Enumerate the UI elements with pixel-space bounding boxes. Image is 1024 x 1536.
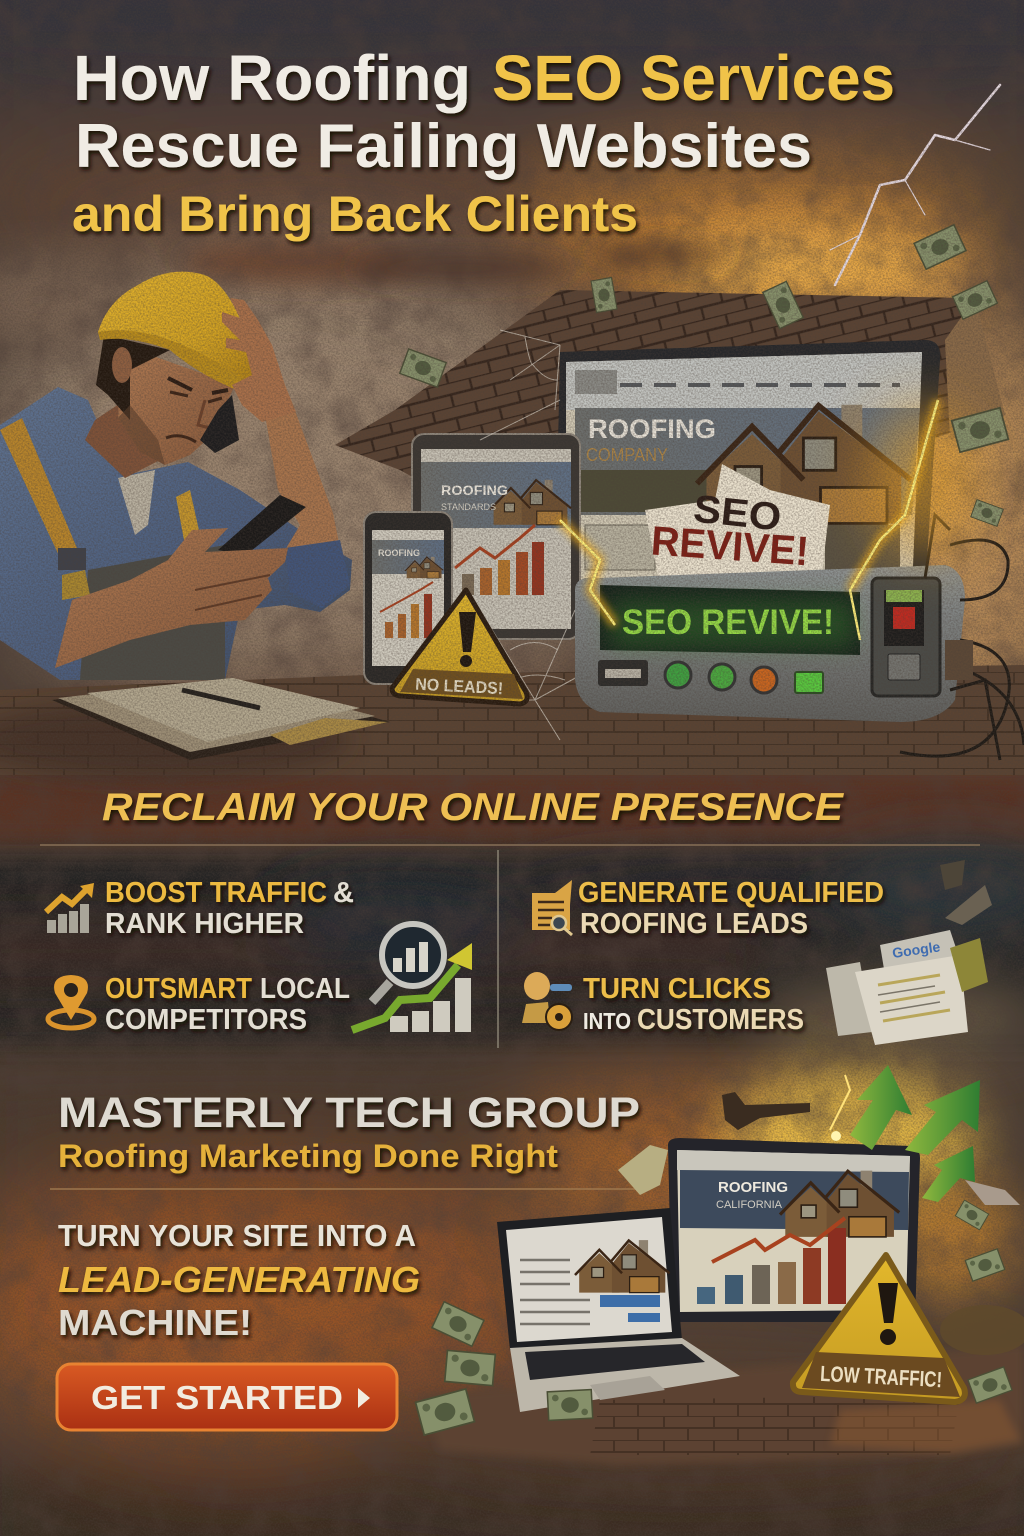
phone device: ROOFING <box>378 548 420 558</box>
google search papers <box>826 860 992 1045</box>
headline: lead generating machine: LEAD-GENERATING <box>58 1259 420 1300</box>
warning sign: no leads: NO LEADS! <box>415 675 504 698</box>
icon: person with coin <box>522 972 572 1030</box>
small tablet: STANDARDS <box>441 502 496 512</box>
screen heading: ROOFING <box>588 414 716 444</box>
warning sign: low traffic <box>793 1255 965 1402</box>
worker with hard hat <box>0 272 352 680</box>
feature: outsmart competitors: COMPETITORS <box>105 1004 307 1036</box>
title: How Roofing <box>73 42 471 114</box>
t-shirt <box>118 470 155 535</box>
tagline: Roofing Marketing Done Right <box>58 1138 558 1174</box>
screen <box>566 352 922 590</box>
clipboard with papers <box>52 678 390 760</box>
flying money bills <box>400 225 1008 526</box>
raised hand on helmet <box>222 298 296 422</box>
cables <box>900 515 1024 760</box>
feature: qualified leads: ROOFING LEADS <box>580 908 808 940</box>
headline: lead generating machine <box>58 1218 420 1343</box>
torn paper: SEO REVIVE <box>645 464 830 586</box>
feature: clicks into customers <box>522 972 804 1036</box>
icon: map pin <box>48 975 94 1028</box>
green growth arrows <box>850 1065 980 1202</box>
sleeve cuff at elbow <box>285 540 350 608</box>
SEO revive machine <box>575 515 1024 760</box>
hero panel <box>575 408 920 515</box>
feature: qualified leads <box>532 877 884 940</box>
feature: boost traffic: & <box>333 877 354 909</box>
desktop monitor: low traffic site: ROOFING <box>718 1179 788 1196</box>
phone device <box>364 512 452 684</box>
side widgets <box>585 525 655 570</box>
feature: outsmart competitors: LOCAL <box>260 973 350 1005</box>
brand name: MASTERLY TECH GROUP <box>58 1089 640 1137</box>
torn paper: SEO REVIVE: REVIVE! <box>650 518 810 574</box>
hard hat <box>98 272 262 398</box>
brand name <box>58 1089 640 1174</box>
call to action button: GET STARTED <box>91 1379 343 1416</box>
headline: lead generating machine: MACHINE! <box>58 1302 252 1343</box>
feature: boost traffic <box>46 877 354 940</box>
icon: document with magnifier <box>532 880 572 935</box>
desktop monitor: low traffic site <box>668 1138 920 1322</box>
suspenders <box>0 418 200 600</box>
feature: clicks into customers: TURN CLICKS <box>583 973 771 1005</box>
machine side panel <box>872 578 940 696</box>
scattered money <box>416 1145 1024 1435</box>
feature: clicks into customers: CUSTOMERS <box>637 1004 804 1036</box>
feature: boost traffic: RANK HIGHER <box>105 908 304 940</box>
monitor bar chart <box>697 1218 846 1304</box>
machine buttons <box>598 660 823 693</box>
feature: qualified leads: GENERATE QUALIFIED <box>578 877 884 909</box>
title: Rescue Failing Websites <box>75 112 812 181</box>
call to action button <box>57 1364 397 1430</box>
bullhorn silhouette <box>722 1092 810 1130</box>
cobwebs <box>450 330 590 740</box>
feature: clicks into customers: INTO <box>583 1008 631 1034</box>
electric sparks <box>560 400 980 640</box>
feature: outsmart competitors <box>48 973 350 1036</box>
torso and shirt <box>0 387 352 680</box>
column divider <box>497 850 499 1048</box>
lightning bolt: sky <box>830 85 1000 285</box>
title: and Bring Back Clients <box>72 186 638 242</box>
torn paper: SEO REVIVE: SEO <box>691 488 783 540</box>
feature: boost traffic: BOOST TRAFFIC <box>105 877 327 909</box>
small tablet <box>412 434 580 639</box>
roof <box>335 290 1005 560</box>
main tablet: roofing company website <box>555 340 940 590</box>
title <box>72 42 895 242</box>
headline: lead generating machine: TURN YOUR SITE INTO A <box>58 1218 416 1253</box>
lower shingles <box>420 1345 1024 1465</box>
hair and ear <box>96 335 170 420</box>
main tablet: roofing company website: COMPANY <box>586 445 668 465</box>
face <box>118 345 235 465</box>
house illustration <box>697 405 911 524</box>
storm clouds <box>350 243 730 284</box>
desktop monitor: low traffic site: CALIFORNIA <box>716 1199 783 1211</box>
laptop <box>497 1208 740 1412</box>
sparks <box>830 1075 850 1141</box>
small tablet: ROOFING <box>441 482 508 498</box>
overall bib <box>80 545 225 680</box>
lower band colours <box>0 772 1024 842</box>
facial features <box>168 378 228 393</box>
google search papers: Google <box>891 938 941 961</box>
held smartphone <box>218 495 306 555</box>
section banner: RECLAIM YOUR ONLINE PRESENCE <box>102 786 844 829</box>
raised forearm <box>265 408 340 550</box>
divider <box>50 1188 640 1190</box>
neck <box>85 400 160 478</box>
tablet bar chart <box>455 525 544 595</box>
growth chart with magnifier <box>352 924 472 1032</box>
forearm and gripping hand <box>55 528 288 668</box>
machine green display: SEO REVIVE! <box>622 603 834 642</box>
warning sign: low traffic: LOW TRAFFIC! <box>820 1361 943 1392</box>
icon: rising bars and arrow <box>46 883 94 933</box>
warning sign: no leads <box>392 590 527 704</box>
phone at ear <box>200 395 239 453</box>
title: SEO Services <box>492 42 895 114</box>
machine green display <box>600 585 860 655</box>
feature: outsmart competitors: OUTSMART <box>105 973 252 1005</box>
foreground roof shingles <box>0 665 1024 780</box>
